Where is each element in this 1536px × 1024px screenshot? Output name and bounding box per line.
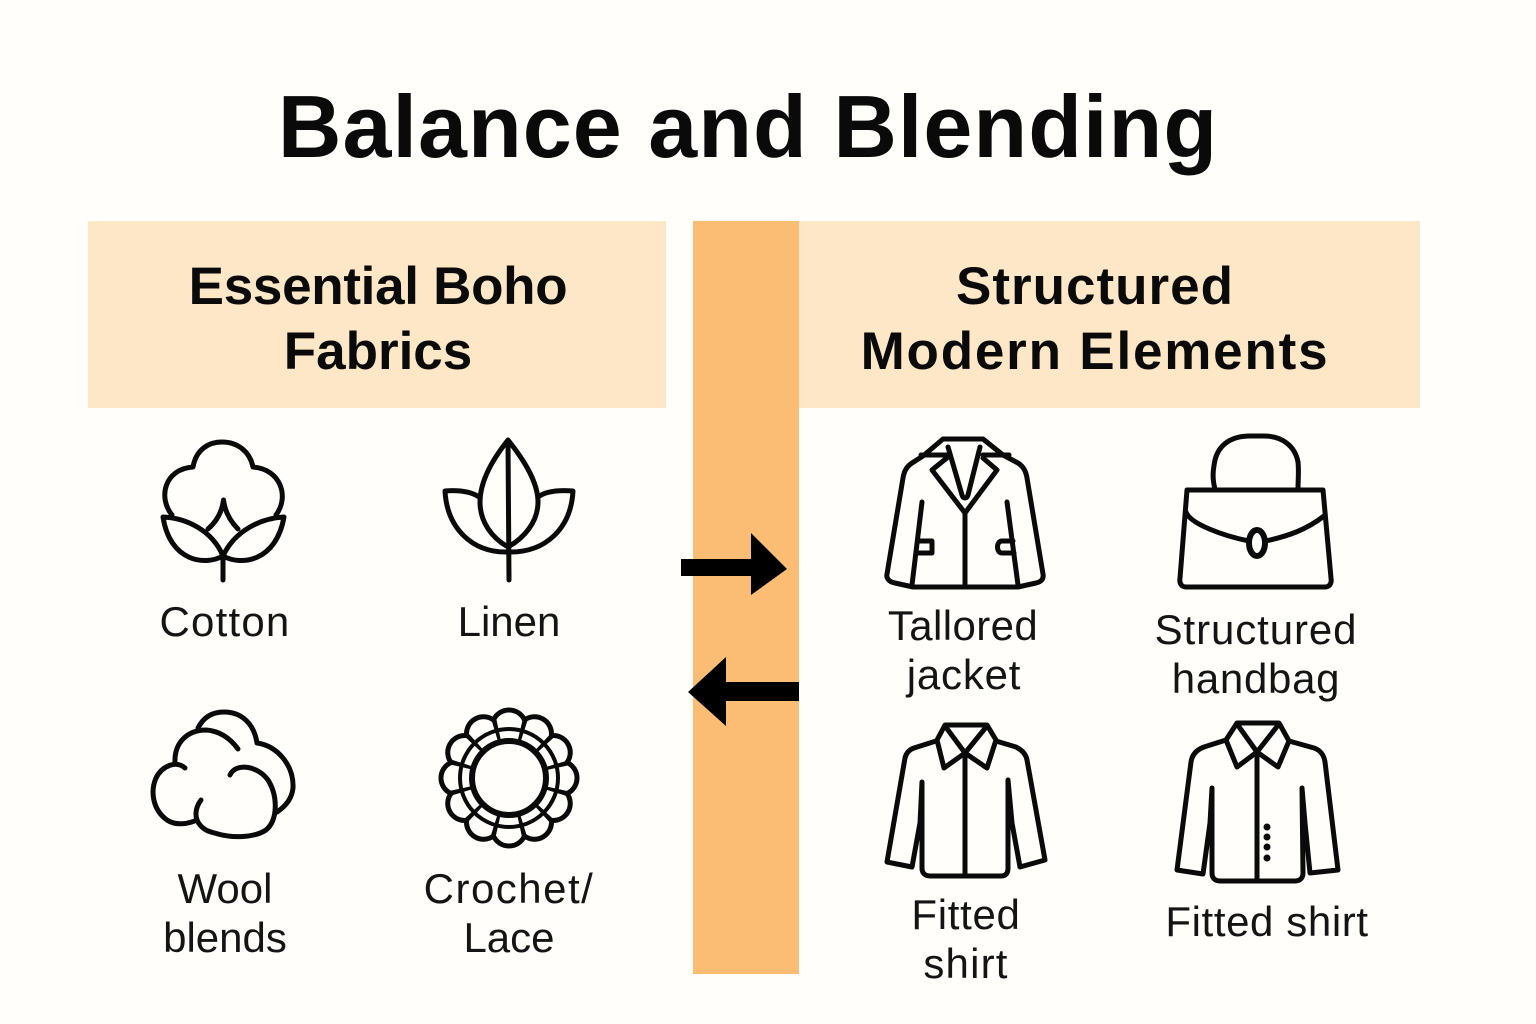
- icon: tailored jacket: [887, 439, 1043, 587]
- heading: modern elements: Structured: [956, 257, 1234, 316]
- label: Wool blends: blends: [163, 914, 287, 961]
- heading: boho fabrics: Fabrics: [284, 322, 472, 381]
- label: Structured handbag: handbag: [1172, 655, 1340, 702]
- heading: boho fabrics: [189, 257, 567, 381]
- panel: left header: [88, 221, 666, 408]
- icon: fitted shirt right: [1177, 723, 1338, 881]
- label: Fitted shirt right: Fitted shirt: [1165, 898, 1369, 945]
- heading: boho fabrics: Essential Boho: [189, 257, 567, 316]
- shirt buttons: [1264, 824, 1270, 862]
- icon: handbag: [1180, 436, 1331, 587]
- panel: central band: [693, 221, 799, 974]
- icon: crochet lace: [441, 710, 577, 846]
- label: Cotton: Cotton: [160, 598, 290, 645]
- label: Tallored jacket: jacket: [907, 651, 1021, 698]
- icon: linen leaf: [445, 440, 573, 580]
- arrow: left: [688, 657, 799, 726]
- label: Fitted shirt: [911, 891, 1021, 987]
- label: Wool blends: [163, 865, 287, 961]
- label: Tallored jacket: [888, 602, 1038, 698]
- icon: fitted shirt: [887, 725, 1045, 876]
- label: Fitted shirt: shirt: [923, 940, 1009, 987]
- label: Structured handbag: Structured: [1155, 606, 1357, 653]
- label: Tallored jacket: Tallored: [888, 602, 1038, 649]
- icon: cotton: [163, 442, 284, 580]
- label: Crochet/Lace: [424, 865, 594, 961]
- arrow: right: [681, 533, 787, 595]
- label: Crochet/Lace: Crochet/: [424, 865, 594, 912]
- label: Structured handbag: [1155, 606, 1357, 702]
- heading: modern elements: Modern Elements: [861, 322, 1329, 381]
- heading: modern elements: [861, 257, 1329, 381]
- label: Fitted shirt: Fitted: [911, 891, 1021, 938]
- panel: right header: [799, 221, 1420, 408]
- title: Balance and Blending: [278, 77, 1218, 176]
- label: Linen: Linen: [458, 598, 560, 645]
- label: Crochet/Lace: Lace: [463, 914, 555, 961]
- label: Wool blends: Wool: [178, 865, 272, 912]
- icon: wool: [153, 712, 293, 837]
